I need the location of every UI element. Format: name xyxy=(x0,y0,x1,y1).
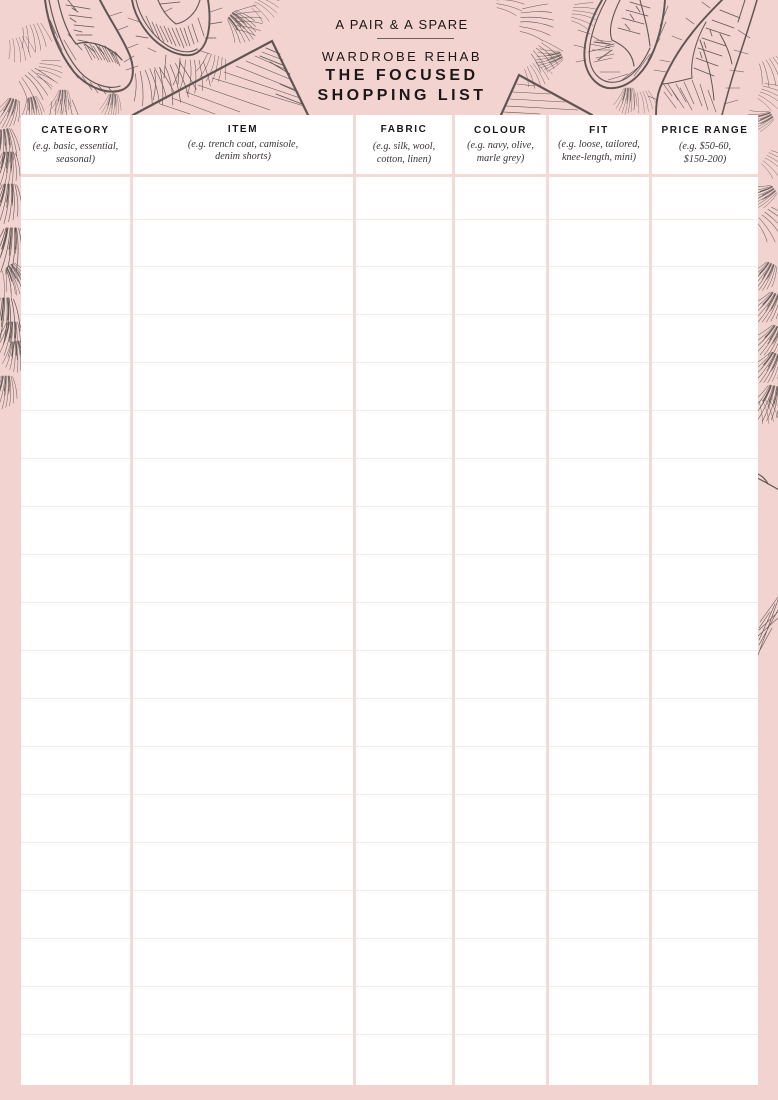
column header: item: (e.g. trench coat, camisole, xyxy=(188,139,298,150)
column header: fabric xyxy=(373,124,435,165)
column header: category xyxy=(33,125,118,165)
column header: price range: (e.g. $50-60, xyxy=(679,141,731,152)
column header: fabric: FABRIC xyxy=(381,124,427,135)
sketch: right shoe two xyxy=(648,0,757,115)
column header: item: ITEM xyxy=(228,124,258,135)
column header: colour: (e.g. navy, olive, xyxy=(467,140,534,151)
sketch: left shoe one xyxy=(45,0,138,94)
heading line two: SHOPPING LIST xyxy=(317,87,487,104)
column header: colour: marle grey) xyxy=(477,153,524,164)
column header: fit: (e.g. loose, tailored, xyxy=(558,139,640,150)
column header: fit xyxy=(558,125,640,163)
column header: fabric: cotton, linen) xyxy=(377,154,431,165)
column header: colour: COLOUR xyxy=(474,125,527,136)
sketch: left shoe two xyxy=(128,0,222,84)
column header: item xyxy=(188,124,298,162)
column header: price range: PRICE RANGE xyxy=(661,125,749,136)
column header: category: seasonal) xyxy=(56,154,95,165)
column header: category: (e.g. basic, essential, xyxy=(33,141,118,152)
sketch: left tufts xyxy=(0,23,84,409)
brand underline xyxy=(377,38,454,39)
sketch: right triangle xyxy=(501,75,592,115)
heading line one: THE FOCUSED xyxy=(325,67,479,84)
column header: price range: $150-200) xyxy=(684,154,726,164)
sketch: right tufts xyxy=(493,0,778,655)
sketch: tufts between shoes and triangle xyxy=(50,0,285,118)
column header: price range xyxy=(661,125,749,164)
column header: item: denim shorts) xyxy=(215,151,271,162)
column header: colour xyxy=(467,125,534,164)
brand name: A PAIR & A SPARE xyxy=(335,17,469,32)
title block xyxy=(317,17,487,104)
column header: fit: FIT xyxy=(589,125,609,136)
subtitle: WARDROBE REHAB xyxy=(322,49,482,64)
sketch: right shoe one xyxy=(574,0,668,88)
column header: category: CATEGORY xyxy=(41,125,110,136)
column header: fit: knee-length, mini) xyxy=(562,152,636,163)
column header: fabric: (e.g. silk, wool, xyxy=(373,141,435,152)
sketch: left triangle xyxy=(133,41,308,115)
